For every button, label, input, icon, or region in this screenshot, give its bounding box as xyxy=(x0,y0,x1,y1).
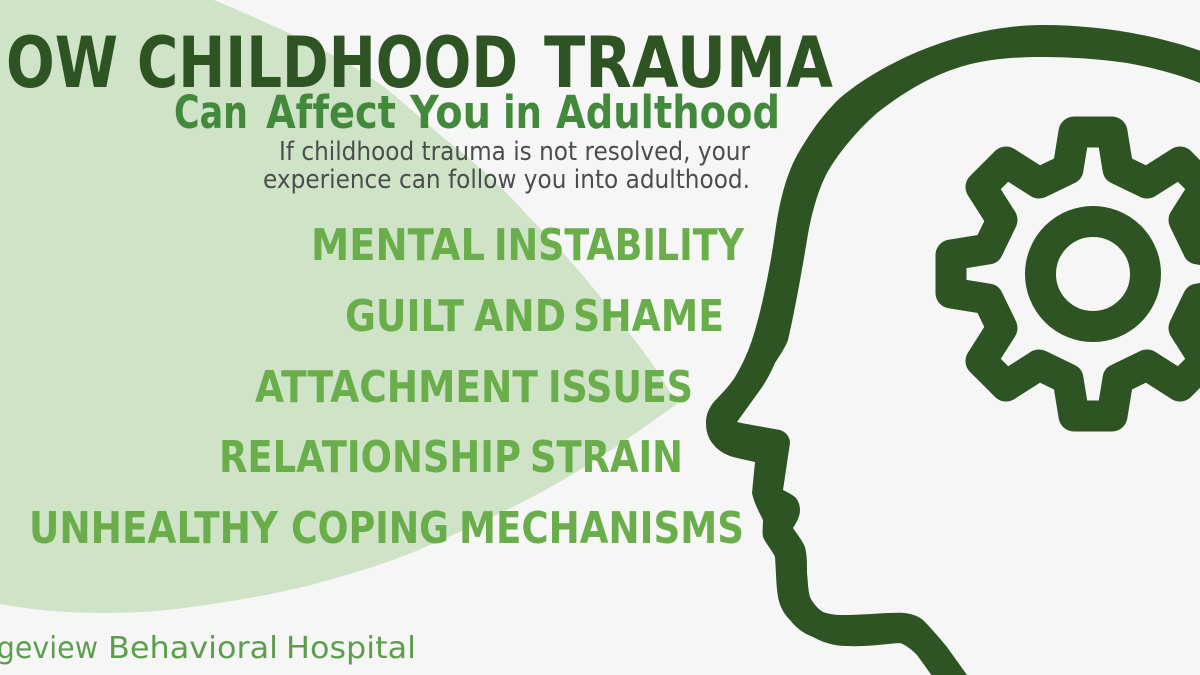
intro text: If childhood trauma is not resolved, your xyxy=(279,137,750,167)
gear hub xyxy=(1040,222,1146,326)
subtitle: Adulthood xyxy=(556,86,780,139)
effect: mental instability: INSTABILITY xyxy=(494,220,745,271)
icon: head outline with gear xyxy=(706,25,1200,675)
effect: guilt and shame xyxy=(345,291,724,342)
subtitle: Affect xyxy=(266,86,396,139)
background shape: pale green leaf xyxy=(0,0,677,613)
effect: guilt and shame: SHAME xyxy=(573,291,724,342)
effect: unhealthy coping mechanisms: MECHANISMS xyxy=(459,503,744,554)
effect: attachment issues: ATTACHMENT xyxy=(255,362,538,413)
subtitle xyxy=(174,86,780,139)
effect: unhealthy coping mechanisms: COPING xyxy=(291,503,449,554)
intro text xyxy=(263,137,750,195)
title: CHILDHOOD xyxy=(137,22,518,104)
effect: mental instability xyxy=(311,220,745,271)
effect: relationship strain: RELATIONSHIP xyxy=(219,432,521,483)
footer: hospital name xyxy=(0,631,416,666)
head profile xyxy=(706,25,1200,675)
subtitle: You xyxy=(409,86,491,139)
effect: unhealthy coping mechanisms: UNHEALTHY xyxy=(29,503,279,554)
subtitle: in xyxy=(503,86,542,139)
effect: mental instability: MENTAL xyxy=(311,220,485,271)
effect: guilt and shame: GUILT xyxy=(345,291,464,342)
title xyxy=(8,34,833,88)
subtitle: Can xyxy=(174,86,248,139)
footer: hospital name: Behavioral xyxy=(108,631,278,666)
effect: relationship strain: STRAIN xyxy=(530,432,683,483)
gear teeth xyxy=(951,132,1200,416)
effect: guilt and shame: AND xyxy=(474,291,566,342)
title: TRAUMA xyxy=(544,22,833,104)
effect: unhealthy coping mechanisms xyxy=(29,503,744,554)
footer: hospital name: Hospital xyxy=(286,631,416,666)
effect: attachment issues: ISSUES xyxy=(548,362,693,413)
intro text: experience can follow you into adulthood. xyxy=(263,165,750,195)
list of effects xyxy=(29,220,745,554)
